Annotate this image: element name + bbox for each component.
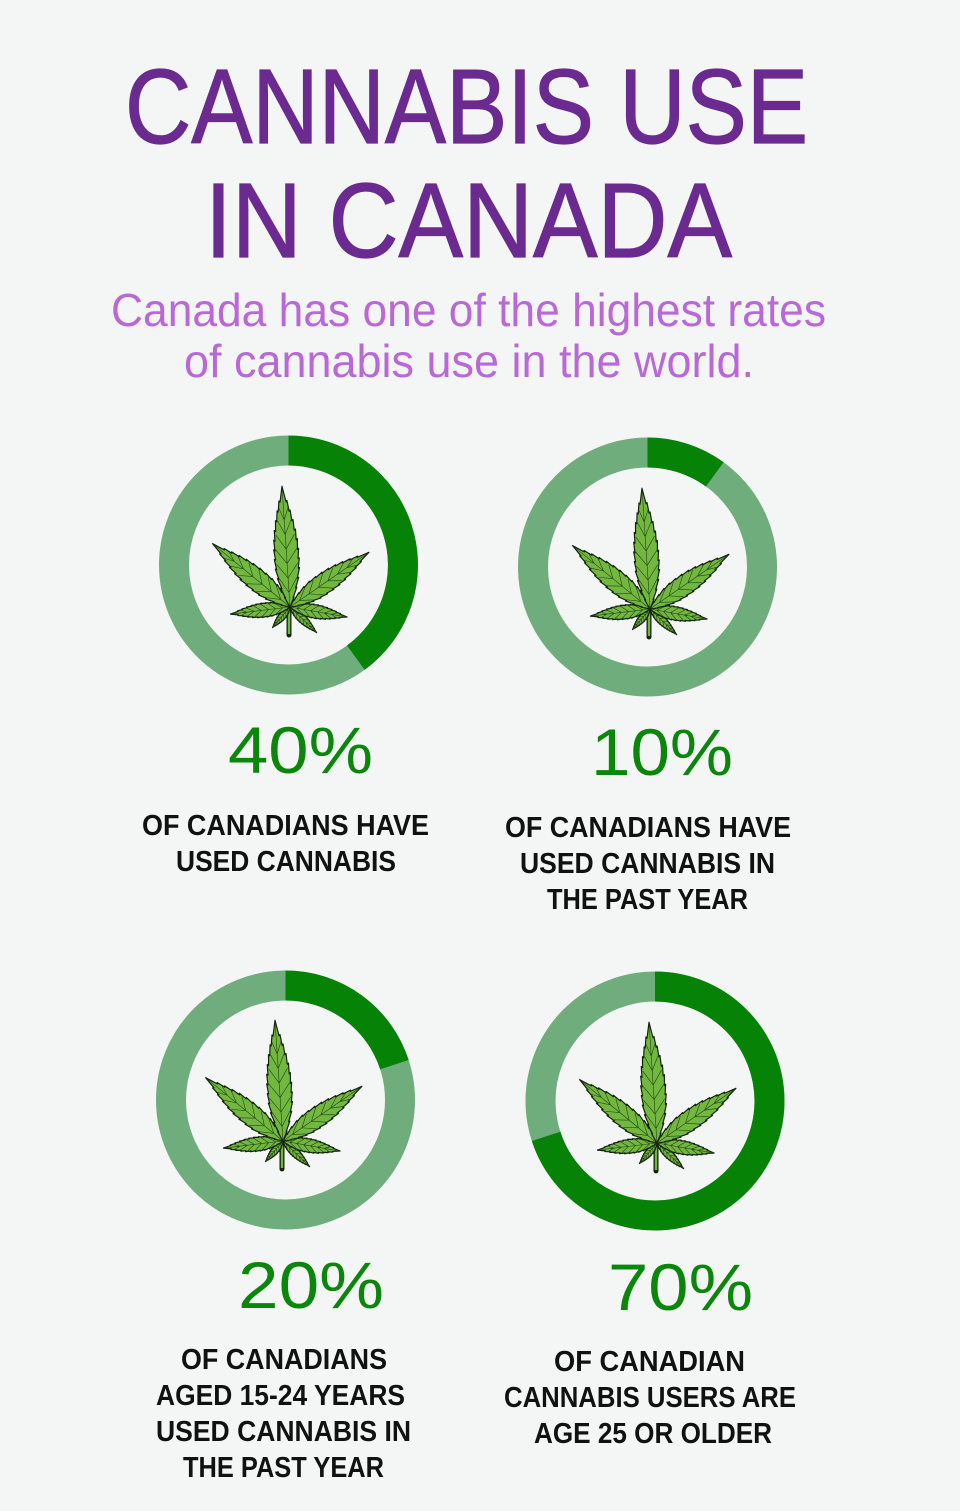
panel: 20% aged 15-24 (156, 986, 411, 1484)
title: CANNABIS USE (125, 48, 808, 166)
caption: 10%: USED CANNABIS IN (520, 848, 775, 880)
caption: 70%: OF CANADIAN (554, 1346, 745, 1378)
icon: cannabis leaf (199, 1019, 368, 1170)
caption: 20%: USED CANNABIS IN (156, 1416, 411, 1448)
title: IN CANADA (205, 162, 732, 280)
donut chart: 40% (174, 450, 403, 680)
icon: cannabis leaf (566, 487, 735, 638)
percentage: 70%: 70% (608, 1250, 753, 1324)
subtitle (111, 284, 826, 387)
caption: 70%: CANNABIS USERS ARE (504, 1382, 796, 1414)
caption: 20% (156, 1344, 411, 1484)
subtitle: of cannabis use in the world. (184, 335, 754, 387)
percentage: 20%: 20% (238, 1248, 384, 1322)
caption: 10% (505, 812, 791, 916)
donut chart: 20% (171, 986, 400, 1214)
subtitle: Canada has one of the highest rates (111, 284, 826, 336)
caption: 70%: AGE 25 OR OLDER (534, 1418, 772, 1450)
caption: 40%: USED CANNABIS (176, 846, 396, 878)
panel: 40% have used cannabis (142, 450, 429, 878)
percentage: 10%: 10% (591, 715, 733, 789)
title (125, 48, 808, 280)
caption: 20%: OF CANADIANS (181, 1344, 387, 1376)
donut chart: 70% (540, 986, 770, 1216)
caption: 40%: OF CANADIANS HAVE (142, 810, 429, 842)
caption: 10%: OF CANADIANS HAVE (505, 812, 791, 844)
caption: 40% (142, 810, 429, 878)
caption: 20%: AGED 15-24 YEARS (156, 1380, 405, 1412)
percentage: 40%: 40% (228, 713, 373, 787)
donut chart: 10% (533, 452, 762, 682)
caption: 20%: THE PAST YEAR (183, 1452, 384, 1484)
caption: 10%: THE PAST YEAR (547, 884, 748, 916)
icon: cannabis leaf (206, 485, 375, 636)
icon: cannabis leaf (573, 1021, 742, 1172)
panel: 70% age 25 or older (504, 986, 796, 1450)
panel: 10% used in past year (505, 452, 791, 916)
caption: 70% (504, 1346, 796, 1450)
